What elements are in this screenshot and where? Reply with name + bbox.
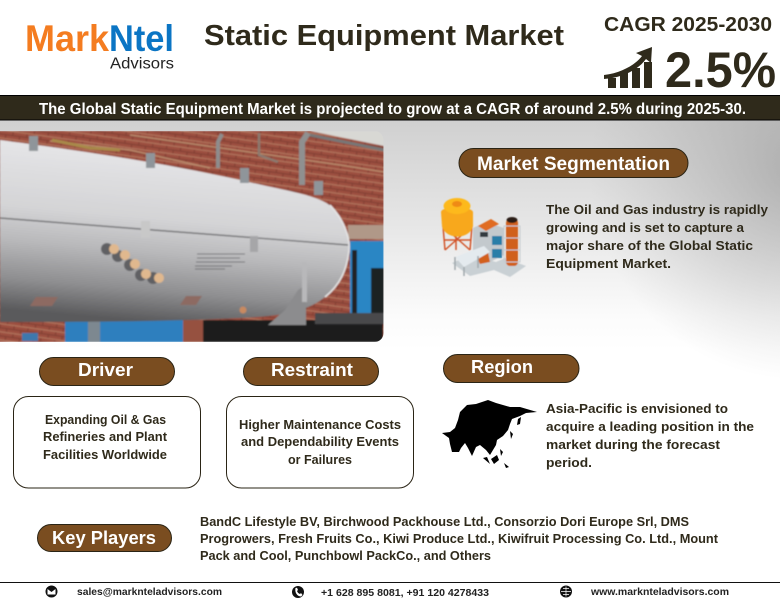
restraint card: and Dependability Events bbox=[241, 435, 399, 449]
text: market segmentation description: major share of the Global Static bbox=[546, 238, 753, 253]
heading: Driver bbox=[40, 358, 174, 386]
driver card: Facilities Worldwide bbox=[43, 448, 167, 462]
text: key players list: Progrowers, Fresh Fruits Co., Kiwi Produce Ltd., Kiwifruit Processing Co. Ltd., Mount bbox=[200, 532, 719, 546]
headline band: The Global Static Equipment Market is projected to grow at a CAGR of around 2.5% during 2025-30. bbox=[39, 101, 746, 118]
heading: Market Segmentation bbox=[459, 148, 688, 178]
logo: MarkNtel Advisors: Advisors bbox=[110, 56, 174, 72]
heading: Key Players: Key Players bbox=[52, 527, 156, 548]
icon: rising bar chart with arrow bbox=[604, 47, 652, 88]
text: key players list: Pack and Cool, Punchbowl PackCo., and Others bbox=[200, 549, 491, 563]
logo: MarkNtel Advisors: Ntel bbox=[109, 18, 174, 59]
heading: Driver: Driver bbox=[78, 359, 133, 380]
footer: contact details bbox=[46, 586, 729, 599]
heading: Region bbox=[444, 354, 579, 382]
text: region description: acquire a leading position in the bbox=[546, 419, 754, 434]
headline band bbox=[0, 95, 780, 120]
heading: Market Segmentation: Market Segmentation bbox=[477, 154, 670, 175]
icon: globe bbox=[560, 586, 572, 598]
restraint card: Higher Maintenance Costs bbox=[239, 418, 401, 432]
heading: Restraint: Restraint bbox=[271, 359, 353, 380]
text: key players list bbox=[200, 515, 719, 563]
text: region description: market during the forecast bbox=[546, 437, 721, 452]
phone numbers: +1 628 895 8081, +91 120 4278433 bbox=[321, 587, 489, 599]
restraint card: or Failures bbox=[288, 453, 352, 467]
text: market segmentation description: Equipment Market. bbox=[546, 256, 671, 271]
logo: MarkNtel Advisors bbox=[25, 18, 174, 72]
heading: Key Players bbox=[38, 524, 172, 552]
icon: oil and gas plant bbox=[441, 198, 526, 277]
panel: restraint bbox=[226, 358, 414, 488]
heading: Restraint bbox=[244, 358, 378, 386]
panel: driver bbox=[14, 358, 200, 488]
text: key players list: BandC Lifestyle BV, Birchwood Packhouse Ltd., Consorzio Dori Europe Srl, DMS bbox=[200, 515, 689, 529]
icon: map of Asia bbox=[442, 400, 537, 468]
text: region description bbox=[546, 401, 754, 470]
driver card: Refineries and Plant bbox=[43, 430, 168, 444]
CAGR label: CAGR 2025-2030 bbox=[604, 14, 772, 36]
text: market segmentation description bbox=[546, 202, 769, 271]
text: region description: Asia-Pacific is envisioned to bbox=[546, 401, 728, 416]
driver card bbox=[14, 396, 200, 488]
CAGR block bbox=[604, 14, 776, 98]
logo: MarkNtel Advisors: Mark bbox=[25, 18, 109, 59]
CAGR value: 2.5% bbox=[665, 42, 776, 98]
text: market segmentation description: The Oil and Gas industry is rapidly bbox=[546, 202, 769, 217]
icon: phone bbox=[292, 586, 304, 598]
restraint card bbox=[226, 396, 414, 488]
heading: Region: Region bbox=[471, 356, 533, 377]
text: market segmentation description: growing and is set to capture a bbox=[546, 220, 745, 235]
text: region description: period. bbox=[546, 455, 592, 470]
website: www.marknteladvisors.com bbox=[590, 586, 729, 598]
icon: email bbox=[46, 586, 58, 598]
email address: sales@marknteladvisors.com bbox=[77, 586, 222, 598]
title: Static Equipment Market bbox=[204, 20, 564, 52]
driver card: Expanding Oil & Gas bbox=[45, 413, 166, 427]
photo: pressure vessel in front of brick building bbox=[0, 131, 384, 342]
